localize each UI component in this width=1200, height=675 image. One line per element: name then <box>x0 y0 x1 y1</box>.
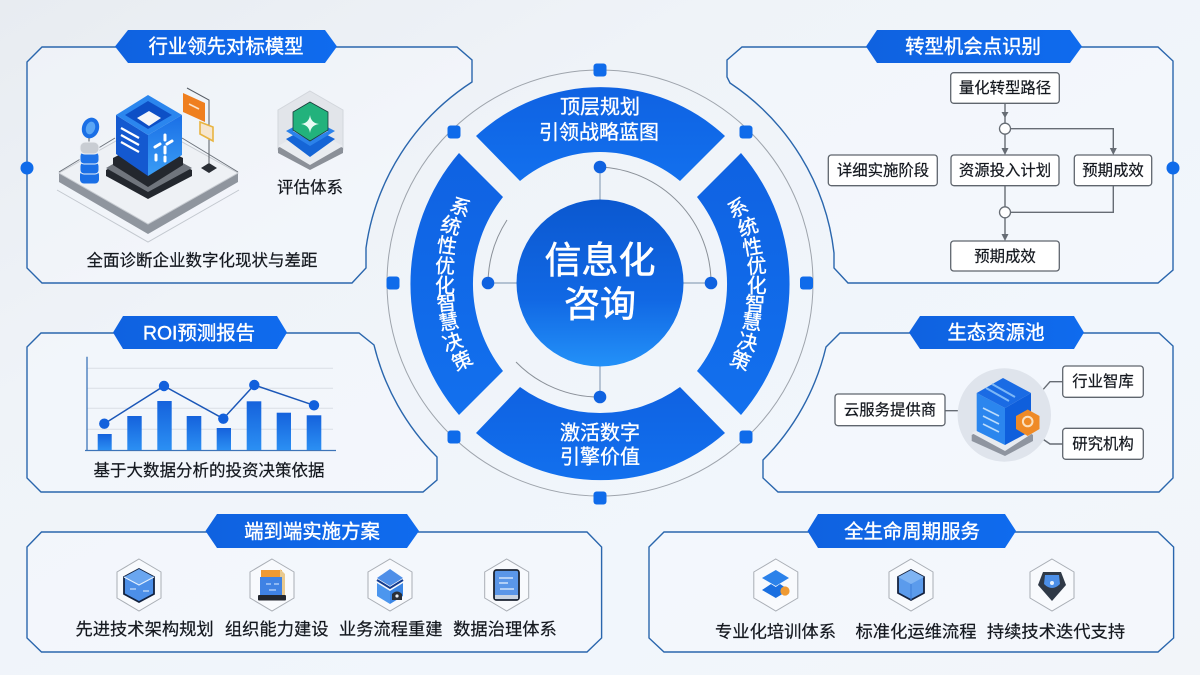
box: research institutes <box>1063 428 1143 459</box>
box: expected results right <box>1074 155 1152 186</box>
segment: right: 性 <box>741 234 764 261</box>
core circle: 信息化 <box>544 240 656 281</box>
segment: right: 系 <box>724 194 752 223</box>
heading: industry benchmark model <box>115 30 337 63</box>
box: implementation stages <box>828 155 937 186</box>
segment: left: 统 <box>438 213 463 240</box>
outer thin ring <box>387 70 813 496</box>
heading: ROI forecast: ROI预测报告 <box>143 322 255 344</box>
box: implementation stages: 详细实施阶段 <box>837 162 929 180</box>
segment: right: 化 <box>747 275 767 298</box>
segment: right: 统 <box>735 213 761 242</box>
panel: industry benchmark model <box>20 30 472 283</box>
central wheel diagram <box>386 64 813 504</box>
heading: ROI forecast <box>113 316 287 349</box>
icon: organization capability <box>250 559 294 611</box>
icon: business process <box>368 559 412 611</box>
heading: industry benchmark model: 行业领先对标模型 <box>148 36 304 58</box>
icon: evaluation system <box>278 91 343 170</box>
panel: ROI forecast <box>27 316 437 492</box>
inner connectors <box>482 161 717 403</box>
icon: data governance <box>485 559 529 611</box>
chart: bars and line <box>85 357 336 450</box>
heading: end-to-end implementation: 端到端实施方案 <box>244 521 380 543</box>
core circle: 咨询 <box>564 284 636 324</box>
panel: full lifecycle services <box>649 514 1174 652</box>
icon: tech architecture <box>117 559 161 611</box>
icon: resource cube <box>958 368 1051 462</box>
icon: training system <box>754 559 798 611</box>
box: research institutes: 研究机构 <box>1072 435 1134 453</box>
connectors <box>945 382 1063 444</box>
segment: right: 策 <box>727 347 754 376</box>
label: data governance system: 数据治理体系 <box>453 619 557 639</box>
segment: left: 系 <box>447 193 474 222</box>
heading: end-to-end implementation <box>206 514 419 548</box>
heading: full lifecycle services: 全生命周期服务 <box>844 521 980 543</box>
segment: bottom: 引擎价值 <box>560 446 640 468</box>
box: cloud providers: 云服务提供商 <box>844 401 936 419</box>
label: continuous iteration: 持续技术迭代支持 <box>987 622 1125 642</box>
segment: left: 智 <box>436 291 458 316</box>
panel: transformation opportunities <box>727 30 1180 283</box>
label: professional training: 专业化培训体系 <box>715 622 836 642</box>
segment: right: 智 <box>744 292 766 317</box>
box: expected results bottom: 预期成效 <box>974 248 1036 266</box>
label: evaluation system: 评估体系 <box>277 178 343 197</box>
segment: bottom: 激活数字 <box>560 422 640 444</box>
segment: left: 决 <box>440 328 466 357</box>
icon: continuous iteration <box>1030 559 1074 611</box>
segment: left: 策 <box>449 347 476 376</box>
box: quantified path <box>951 73 1059 103</box>
heading: ecosystem resources: 生态资源池 <box>948 322 1044 344</box>
icon: standard operations <box>889 559 933 611</box>
segment: right: 慧 <box>740 310 763 335</box>
icon: isometric data platform <box>57 88 239 242</box>
box: expected results right: 预期成效 <box>1082 162 1144 180</box>
segment: top <box>476 87 725 181</box>
heading: transformation opportunities <box>866 30 1082 63</box>
label: tech architecture planning: 先进技术架构规划 <box>75 619 214 639</box>
segment: left: 化 <box>435 275 455 298</box>
caption: digital diagnosis: 全面诊断企业数字化现状与差距 <box>86 251 318 270</box>
segment: right: 优 <box>746 254 768 279</box>
segment: left: 性 <box>435 233 458 259</box>
box: quantified path: 量化转型路径 <box>959 79 1051 97</box>
label: business process rebuild: 业务流程重建 <box>339 619 443 639</box>
segment: left: 优 <box>434 254 456 279</box>
heading: full lifecycle services <box>808 514 1016 548</box>
panel: end-to-end implementation <box>27 514 602 652</box>
ring nodes <box>386 64 813 504</box>
segment: right: 决 <box>735 329 760 356</box>
box: cloud providers <box>835 394 945 426</box>
heading: ecosystem resources <box>909 316 1084 349</box>
box: think tanks: 行业智库 <box>1072 372 1134 390</box>
label: organizational capability: 组织能力建设 <box>225 619 329 639</box>
segment: right <box>697 153 790 415</box>
panel: ecosystem resources <box>763 316 1173 492</box>
box: resource plan <box>951 155 1059 186</box>
label: standard operations: 标准化运维流程 <box>856 622 976 642</box>
box: think tanks <box>1063 366 1143 397</box>
caption: ROI basis: 基于大数据分析的投资决策依据 <box>94 461 324 480</box>
box: expected results bottom <box>951 241 1059 271</box>
segment: left <box>410 153 503 415</box>
flowchart <box>828 73 1152 271</box>
box: resource plan: 资源投入计划 <box>959 162 1051 180</box>
segment: top: 顶层规划 <box>560 96 640 118</box>
core circle <box>516 200 684 366</box>
segment: top: 引领战略蓝图 <box>539 121 659 144</box>
heading: transformation opportunities: 转型机会点识别 <box>905 36 1041 58</box>
segment: bottom <box>476 387 725 480</box>
segment: left: 慧 <box>437 309 461 336</box>
